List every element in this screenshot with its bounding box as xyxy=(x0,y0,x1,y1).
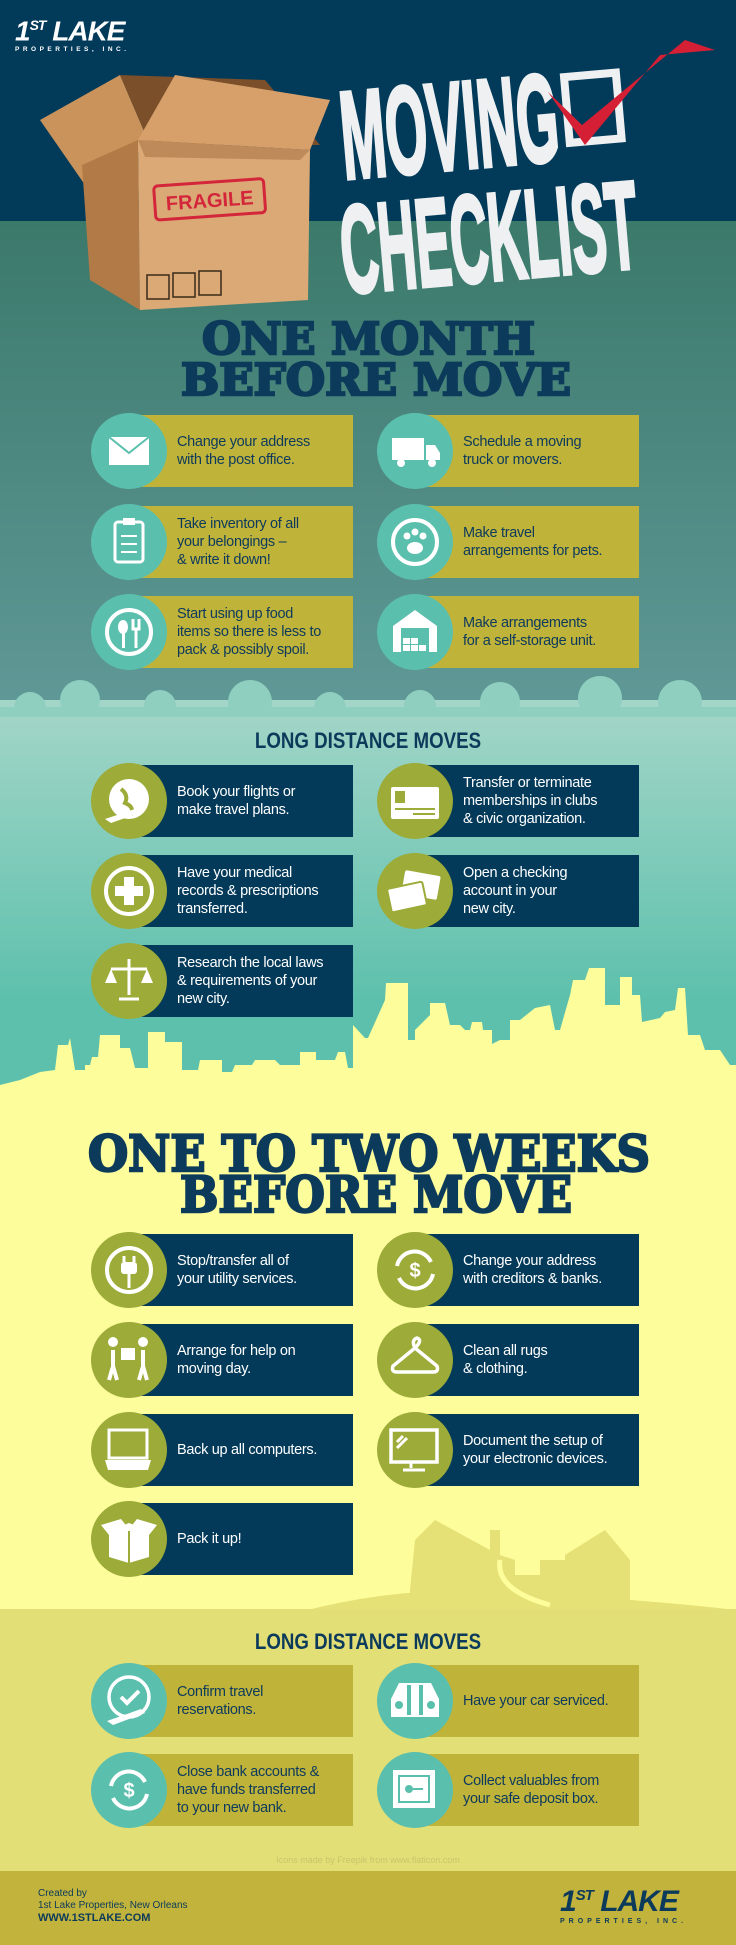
card: local laws: & requirements of your xyxy=(177,973,317,989)
houses silhouette xyxy=(312,1520,726,1609)
card: safe deposit: your safe deposit box. xyxy=(463,1791,598,1807)
card: electronics xyxy=(377,1412,639,1488)
card: medical: Have your medical xyxy=(177,865,292,881)
heading: long distance moves 2: LONG DISTANCE MOVES xyxy=(255,1629,481,1654)
logo top: PROPERTIES, INC. xyxy=(15,46,130,53)
card: rugs: Clean all rugs xyxy=(463,1343,547,1359)
panel: one to two weeks cards xyxy=(91,1232,639,1577)
card: checking account: new city. xyxy=(463,901,516,917)
card: moving truck: truck or movers. xyxy=(463,452,562,468)
card: utilities xyxy=(91,1232,353,1308)
card: inventory: & write it down! xyxy=(177,552,271,568)
illustration: cardboard box: FRAGILE xyxy=(165,187,254,215)
card: inventory: your belongings – xyxy=(177,534,286,550)
card: safe deposit xyxy=(377,1752,639,1828)
card: change address post office xyxy=(91,413,353,489)
card: close bank accounts: have funds transferred xyxy=(177,1782,316,1798)
card: flights: Book your flights or xyxy=(177,784,295,800)
heading: one to two weeks before move xyxy=(88,1128,650,1218)
footer: created by xyxy=(38,1888,188,1924)
card: local laws xyxy=(91,943,353,1019)
card: close bank accounts: $ xyxy=(123,1780,135,1802)
heading: long distance moves 1: LONG DISTANCE MOVES xyxy=(255,728,481,753)
card: memberships: memberships in clubs xyxy=(463,793,597,809)
card: food: pack & possibly spoil. xyxy=(177,642,309,658)
card: pack it up: Pack it up! xyxy=(177,1531,241,1547)
card: checking account: Open a checking xyxy=(463,865,567,881)
card: moving truck: Schedule a moving xyxy=(463,434,581,450)
card: storage xyxy=(377,594,639,670)
card: food xyxy=(91,594,353,670)
card: help on moving day: moving day. xyxy=(177,1361,251,1377)
card: inventory xyxy=(91,504,353,580)
footer logo: PROPERTIES, INC. xyxy=(560,1918,687,1925)
card: close bank accounts xyxy=(91,1752,353,1828)
card: backup computers xyxy=(91,1412,353,1488)
panel: long distance cards 2 xyxy=(91,1663,639,1828)
footer: created by: WWW.1STLAKE.COM xyxy=(38,1912,150,1924)
card: memberships: Transfer or terminate xyxy=(463,775,592,791)
card: medical: records & prescriptions xyxy=(177,883,318,899)
card: car serviced xyxy=(377,1663,639,1739)
card: confirm travel xyxy=(91,1663,353,1739)
card: storage: Make arrangements xyxy=(463,615,587,631)
card: pets xyxy=(377,504,639,580)
card: creditors: with creditors & banks. xyxy=(463,1271,602,1287)
title: Moving Checklist xyxy=(335,40,715,310)
card: storage: for a self-storage unit. xyxy=(463,633,596,649)
card: confirm travel: Confirm travel xyxy=(177,1684,263,1700)
illustration: cardboard box xyxy=(40,75,330,310)
credit text: Icons made by Freepik from www.flaticon.com xyxy=(276,1855,460,1865)
card: memberships xyxy=(377,763,639,839)
card: local laws: Research the local laws xyxy=(177,955,323,971)
card: food: items so there is less to xyxy=(177,624,321,640)
card: creditors: Change your address xyxy=(463,1253,596,1269)
card: local laws: new city. xyxy=(177,991,230,1007)
footer: created by: 1st Lake Properties, New Orleans xyxy=(38,1900,188,1911)
footer logo: 1ST LAKE xyxy=(560,1885,678,1918)
card: utilities: your utility services. xyxy=(177,1271,297,1287)
card: pack it up xyxy=(91,1501,353,1577)
card: backup computers: Back up all computers. xyxy=(177,1442,317,1458)
card: rugs: & clothing. xyxy=(463,1361,527,1377)
card: safe deposit: Collect valuables from xyxy=(463,1773,599,1789)
panel: one month cards xyxy=(91,413,639,670)
card: change address post office: Change your address xyxy=(177,434,310,450)
skyline xyxy=(0,968,736,1105)
card: pets: arrangements for pets. xyxy=(463,543,602,559)
card: electronics: your electronic devices. xyxy=(463,1451,607,1467)
card: creditors xyxy=(377,1232,639,1308)
card: close bank accounts: to your new bank. xyxy=(177,1800,286,1816)
card: medical: transferred. xyxy=(177,901,248,917)
card: help on moving day xyxy=(91,1322,353,1398)
card: food: Start using up food xyxy=(177,606,293,622)
card: flights xyxy=(91,763,353,839)
card: creditors: $ xyxy=(409,1260,421,1282)
card: memberships: & civic organization. xyxy=(463,811,586,827)
card: help on moving day: Arrange for help on xyxy=(177,1343,295,1359)
card: electronics: Document the setup of xyxy=(463,1433,603,1449)
card: close bank accounts: Close bank accounts & xyxy=(177,1764,319,1780)
card: utilities: Stop/transfer all of xyxy=(177,1253,289,1269)
card: inventory: Take inventory of all xyxy=(177,516,299,532)
card: checking account xyxy=(377,853,639,929)
card: checking account: account in your xyxy=(463,883,557,899)
card: moving truck xyxy=(377,413,639,489)
footer: created by: Created by xyxy=(38,1888,87,1899)
card: medical xyxy=(91,853,353,929)
card: flights: make travel plans. xyxy=(177,802,289,818)
card: car serviced: Have your car serviced. xyxy=(463,1693,608,1709)
heading: one month before move xyxy=(181,318,570,400)
card: change address post office: with the post office. xyxy=(177,452,295,468)
logo top: 1ST LAKE xyxy=(15,15,124,46)
panel: long distance cards 1 xyxy=(91,763,639,1019)
card: rugs xyxy=(377,1322,639,1398)
card: pets: Make travel xyxy=(463,525,535,541)
card: confirm travel: reservations. xyxy=(177,1702,256,1718)
